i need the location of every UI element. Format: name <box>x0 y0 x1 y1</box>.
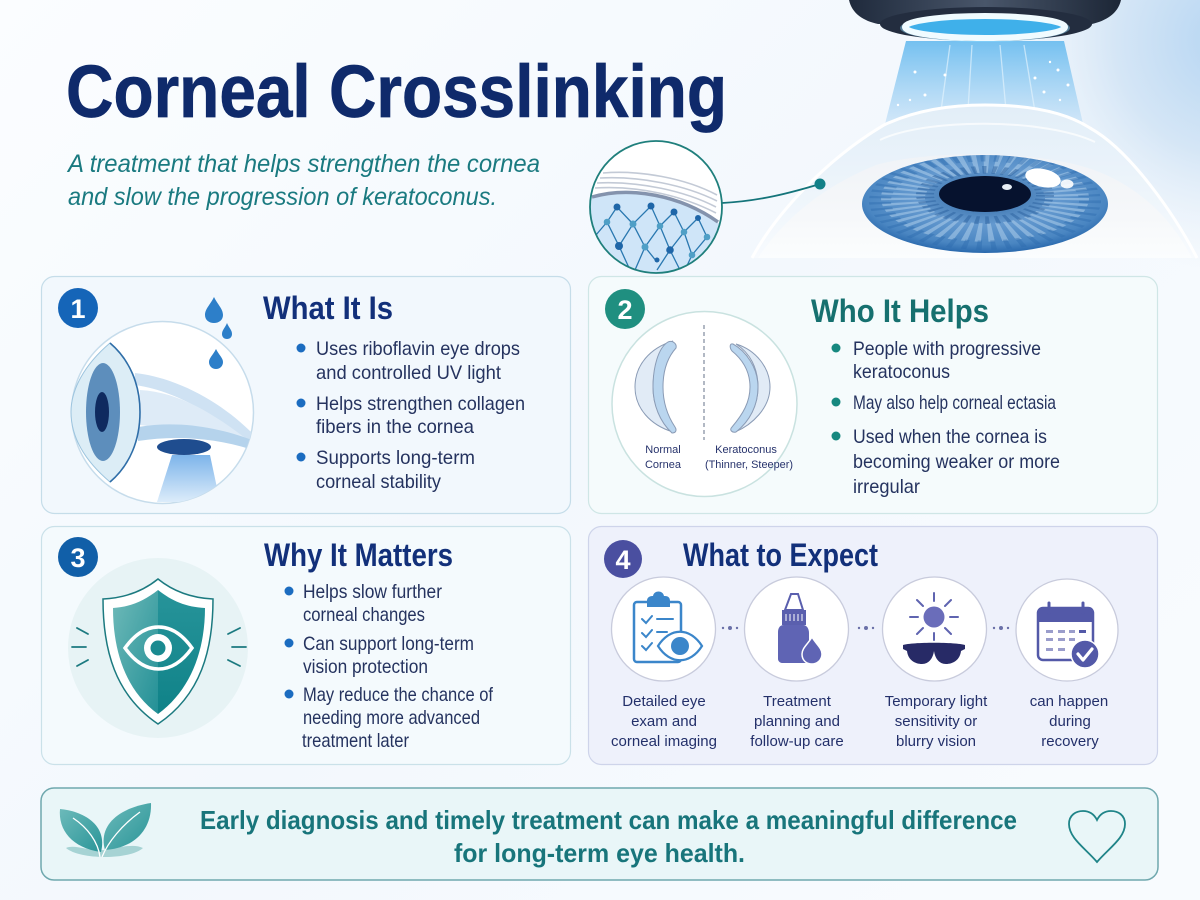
panel: what it is <box>42 276 570 514</box>
bullet list: Helps slow further <box>303 581 442 603</box>
step 4: calendar: can happen <box>1030 693 1108 710</box>
subtitle: and slow the progression of keratoconus. <box>68 183 497 211</box>
connector dots <box>722 626 738 630</box>
heading: What to Expect <box>683 537 878 573</box>
bullet list: Used when the cornea is <box>853 426 1047 448</box>
bullet list: irregular <box>853 476 920 498</box>
step 2: bottle: Treatment <box>763 693 832 710</box>
panel: why it matters <box>42 526 570 764</box>
step 2: bottle <box>744 577 848 750</box>
illustration: cornea comparison: Cornea <box>645 459 682 471</box>
message: Early diagnosis and timely treatment can make a meaningful difference <box>200 805 1017 835</box>
step 1: eye exam <box>611 577 717 750</box>
step 1: eye exam: exam and <box>631 713 697 730</box>
heading: Who It Helps <box>811 293 989 329</box>
badge 2 <box>605 289 645 329</box>
illustration: cornea comparison: (Thinner, Steeper) <box>705 459 793 471</box>
message: for long-term eye health. <box>454 838 745 868</box>
bullet list: keratoconus <box>853 361 950 383</box>
bullet list <box>284 581 493 752</box>
title: Corneal Crosslinking <box>66 50 727 133</box>
normal cornea <box>635 341 676 433</box>
illustration: eye with cornea <box>752 105 1197 258</box>
step 2: bottle: follow-up care <box>750 733 844 750</box>
step 2: bottle: planning and <box>754 713 840 730</box>
bullet list: Helps strengthen collagen <box>316 393 525 415</box>
illustration: eye drops and UV <box>71 322 254 504</box>
badge 1 <box>58 288 98 328</box>
bullet list: corneal changes <box>303 604 425 626</box>
badge 4: 4 <box>615 545 631 575</box>
illustration: cornea comparison <box>612 312 797 496</box>
inset: collagen network <box>585 141 725 280</box>
bullet list: May also help corneal ectasia <box>853 392 1056 414</box>
panel: what to expect <box>588 526 1158 764</box>
bullet list: fibers in the cornea <box>316 416 474 438</box>
icon: heart <box>1069 811 1125 862</box>
step 1: eye exam: Detailed eye <box>622 693 706 710</box>
callout connector <box>722 178 826 203</box>
illustration: cornea comparison: Keratoconus <box>715 444 777 456</box>
step 3: sun and sunglasses: blurry vision <box>896 733 976 750</box>
illustration: UV device and beam <box>849 0 1121 128</box>
bullet list: treatment later <box>302 730 409 752</box>
step 4: calendar <box>1016 579 1118 750</box>
bullet list: becoming weaker or more <box>853 451 1060 473</box>
icon: leaves <box>60 803 151 857</box>
heading: Why It Matters <box>264 537 453 573</box>
illustration: cornea comparison: Normal <box>645 444 681 456</box>
step 3: sun and sunglasses <box>882 577 988 750</box>
heading: What It Is <box>263 290 393 326</box>
bullet list <box>832 338 1060 498</box>
bullet list: Can support long-term <box>303 633 474 655</box>
step 4: calendar: during <box>1049 713 1091 730</box>
banner <box>41 788 1158 880</box>
icon: water drops <box>205 297 232 369</box>
bullet list <box>296 338 525 493</box>
keratoconus cornea <box>730 344 770 432</box>
step 3: sun and sunglasses: Temporary light <box>885 693 988 710</box>
panel: who it helps <box>588 276 1158 514</box>
bullet list: Supports long-term <box>316 447 475 469</box>
bullet list: People with progressive <box>853 338 1041 360</box>
step 3: sun and sunglasses: sensitivity or <box>895 713 977 730</box>
connector dots <box>993 626 1009 630</box>
bullet list: vision protection <box>303 656 428 678</box>
step 4: calendar: recovery <box>1041 733 1099 750</box>
bullet list: needing more advanced <box>303 707 480 729</box>
icon: shield with eye <box>68 558 248 738</box>
message <box>200 805 1017 868</box>
bullet list: Uses riboflavin eye drops <box>316 338 520 360</box>
bullet list: May reduce the chance of <box>303 684 493 706</box>
badge 4 <box>604 540 642 578</box>
subtitle: A treatment that helps strengthen the cornea <box>66 150 540 178</box>
badge 2: 2 <box>617 295 633 325</box>
eye iris <box>862 155 1108 253</box>
bullet list: corneal stability <box>316 471 441 493</box>
badge 3: 3 <box>70 543 86 573</box>
badge 3 <box>58 537 98 577</box>
step 1: eye exam: corneal imaging <box>611 733 717 750</box>
subtitle <box>66 150 540 211</box>
bullet list: and controlled UV light <box>316 362 502 384</box>
badge 1: 1 <box>70 294 86 324</box>
connector dots <box>858 626 874 630</box>
